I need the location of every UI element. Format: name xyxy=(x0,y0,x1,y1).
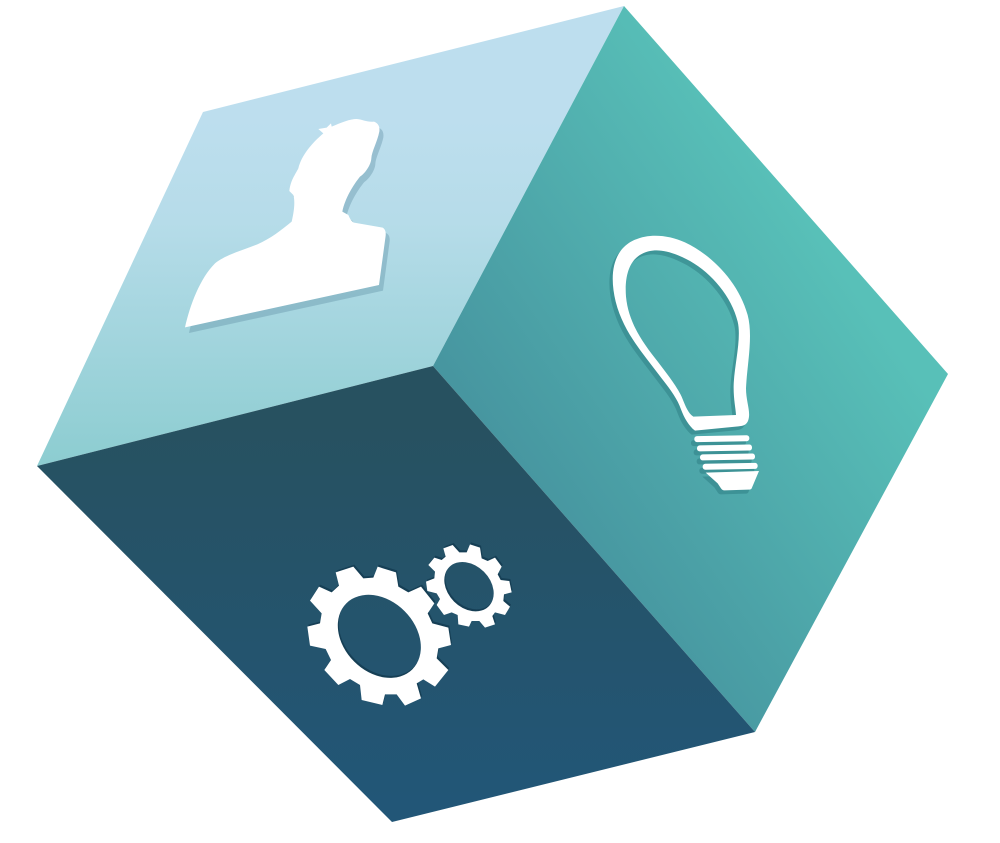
icon: light bulb xyxy=(609,236,759,494)
panel: bottom face xyxy=(37,366,755,822)
panel: right face xyxy=(433,6,948,732)
panel: top face xyxy=(37,6,624,466)
icon: gears xyxy=(307,542,513,706)
icon: person silhouette xyxy=(185,119,390,333)
